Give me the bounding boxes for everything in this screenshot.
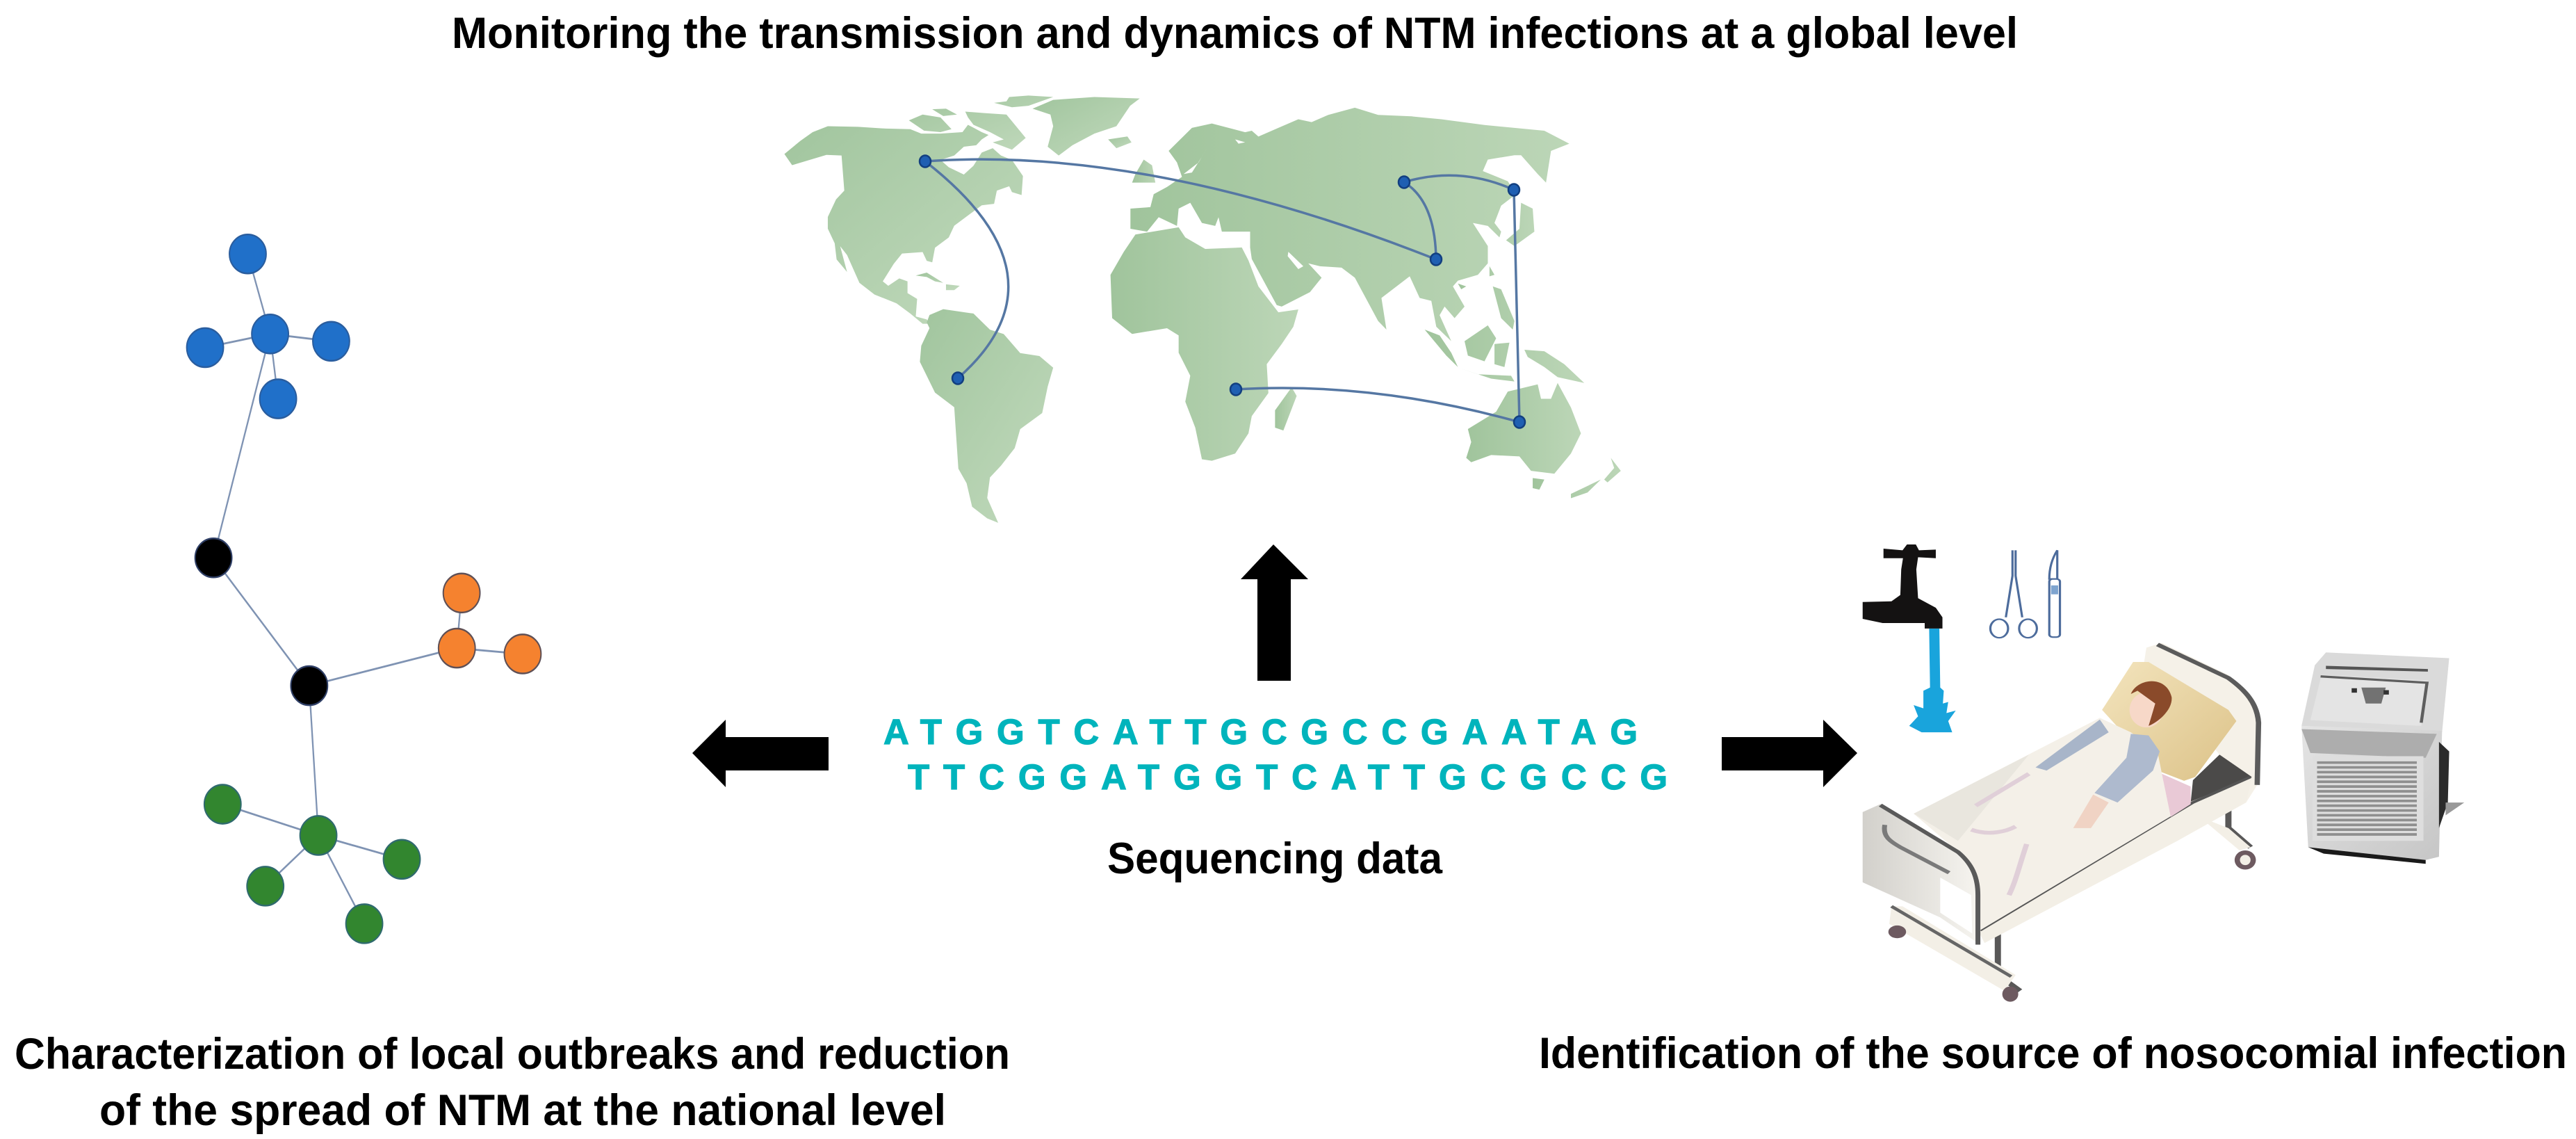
dark mattress end — [2191, 754, 2252, 802]
black intermediate nodes — [195, 538, 327, 705]
arctic islands — [909, 95, 1053, 150]
australia — [1466, 383, 1581, 474]
green cluster — [204, 784, 420, 943]
uk and ireland — [1132, 159, 1155, 183]
arrow: left — [692, 720, 829, 787]
title: global monitoring: Monitoring the transmission and dynamics of NTM infections at a global level — [452, 9, 2018, 58]
americas and greenland — [784, 95, 1140, 523]
south america — [920, 309, 1053, 523]
bed legs — [1998, 802, 2251, 991]
caption: local outbreaks — [15, 1030, 1010, 1135]
sequence reads: ATGGTCATTGCGCCGAATAG — [883, 712, 1638, 752]
arrow: up — [1241, 544, 1308, 681]
iceland — [1108, 136, 1132, 148]
caption: local outbreaks: of the spread of NTM at the national level — [99, 1086, 946, 1135]
patient arm — [2073, 795, 2109, 828]
world map with transmission links — [784, 95, 1621, 523]
label: sequencing data: Sequencing data — [1107, 834, 1443, 883]
caption: local outbreaks: Characterization of local outbreaks and reduction — [15, 1030, 1010, 1079]
pillow — [2102, 662, 2236, 781]
inland seas — [1184, 139, 1303, 269]
hospital sources illustration — [1863, 544, 2464, 1002]
icon: surgical scissors — [1990, 550, 2037, 638]
tasmania and new zealand — [1533, 458, 1621, 499]
madagascar — [1275, 387, 1296, 430]
grill — [2317, 763, 2417, 834]
footboard — [1863, 804, 1978, 943]
hospital bed with patient — [1863, 643, 2260, 1002]
caption: nosocomial source: Identification of the source of nosocomial infection — [1539, 1029, 2567, 1078]
patient gown — [2035, 720, 2109, 770]
caribbean — [915, 273, 960, 290]
sequence reads: TTCGGATGGTCATTGCGCCG — [908, 757, 1668, 797]
patient head — [2130, 693, 2163, 727]
icon: scalpel — [2049, 550, 2060, 637]
blue cluster — [187, 234, 350, 419]
japan and east asian islands — [1458, 203, 1534, 289]
north america — [784, 124, 1023, 324]
arrow: right — [1722, 720, 1857, 787]
bed base — [1978, 777, 2252, 943]
south east asian islands — [1425, 286, 1584, 383]
edges — [205, 254, 523, 923]
transmission links — [925, 159, 1519, 422]
old world — [1111, 108, 1621, 499]
blanket — [1914, 718, 2175, 930]
greenland — [1033, 97, 1140, 156]
eurasia — [1130, 108, 1570, 341]
africa — [1111, 227, 1298, 461]
icon: water tap — [1863, 544, 1956, 732]
orange cluster — [439, 574, 541, 674]
sequence reads — [883, 712, 1668, 797]
patient legs and folds — [1971, 774, 2029, 895]
headboard — [2144, 643, 2260, 802]
heater-cooler machine — [2301, 652, 2464, 864]
location dots — [920, 156, 1525, 428]
network of local outbreaks — [187, 234, 541, 943]
wheels — [1889, 850, 2256, 1002]
